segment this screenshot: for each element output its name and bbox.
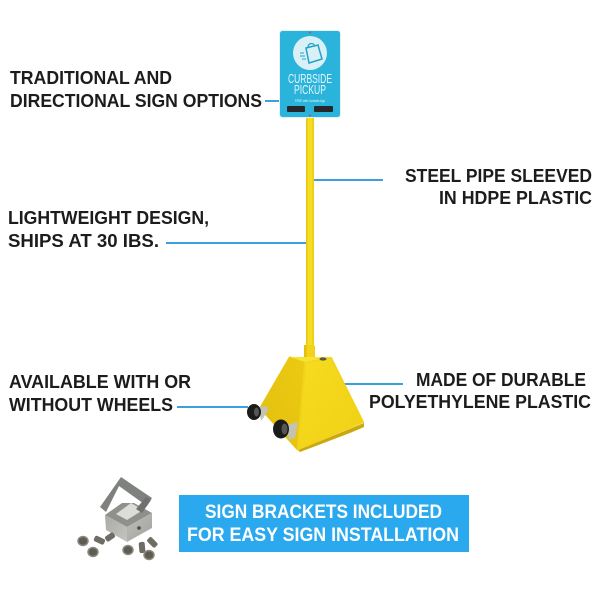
nuts: [78, 536, 154, 560]
sign text: CURBSIDE: [288, 72, 332, 86]
banner: brackets included: SIGN BRACKETS INCLUDED: [205, 502, 442, 523]
sign text: FREE with Curbside App: [295, 99, 325, 103]
banner: brackets included: FOR EASY SIGN INSTALLATION: [187, 525, 459, 546]
callout: wheels: WITHOUT WHEELS: [9, 394, 173, 415]
banner: brackets included: [179, 495, 469, 552]
bracket arm: [100, 477, 152, 512]
callout: steel pipe: IN HDPE PLASTIC: [439, 187, 592, 208]
sign text: PICKUP: [294, 83, 326, 97]
sign text: [288, 72, 332, 103]
sign: curbside pickup: [279, 30, 341, 118]
icon: sign bracket and hardware: [78, 477, 158, 560]
callout: polyethylene: POLYETHYLENE PLASTIC: [369, 391, 591, 412]
wheel: rear: [247, 404, 268, 421]
icon: shopping bag: [293, 36, 327, 70]
callout: sign options: TRADITIONAL AND: [10, 67, 172, 88]
app store badges: [287, 106, 333, 112]
callout: sign options: DIRECTIONAL SIGN OPTIONS: [10, 90, 262, 111]
callout: lightweight design: SHIPS AT 30 IBS.: [8, 230, 159, 251]
callout: steel pipe: [313, 165, 592, 208]
callout: sign options: [10, 67, 280, 111]
yellow pyramid base with wheels: [247, 345, 364, 452]
callout: wheels: [9, 371, 248, 415]
pyramid body: [261, 357, 364, 452]
wheel: front: [273, 420, 298, 440]
callout: lightweight design: [8, 207, 307, 251]
callout: lightweight design: LIGHTWEIGHT DESIGN,: [8, 207, 209, 228]
callout: steel pipe: STEEL PIPE SLEEVED: [405, 165, 592, 186]
bracket box: [105, 503, 152, 527]
callout: wheels: AVAILABLE WITH OR: [9, 371, 191, 392]
collar: [304, 345, 315, 359]
yellow pole: [306, 116, 314, 348]
callout: polyethylene: [343, 369, 591, 412]
bolts: [93, 532, 158, 553]
callout: polyethylene: MADE OF DURABLE: [416, 369, 586, 390]
